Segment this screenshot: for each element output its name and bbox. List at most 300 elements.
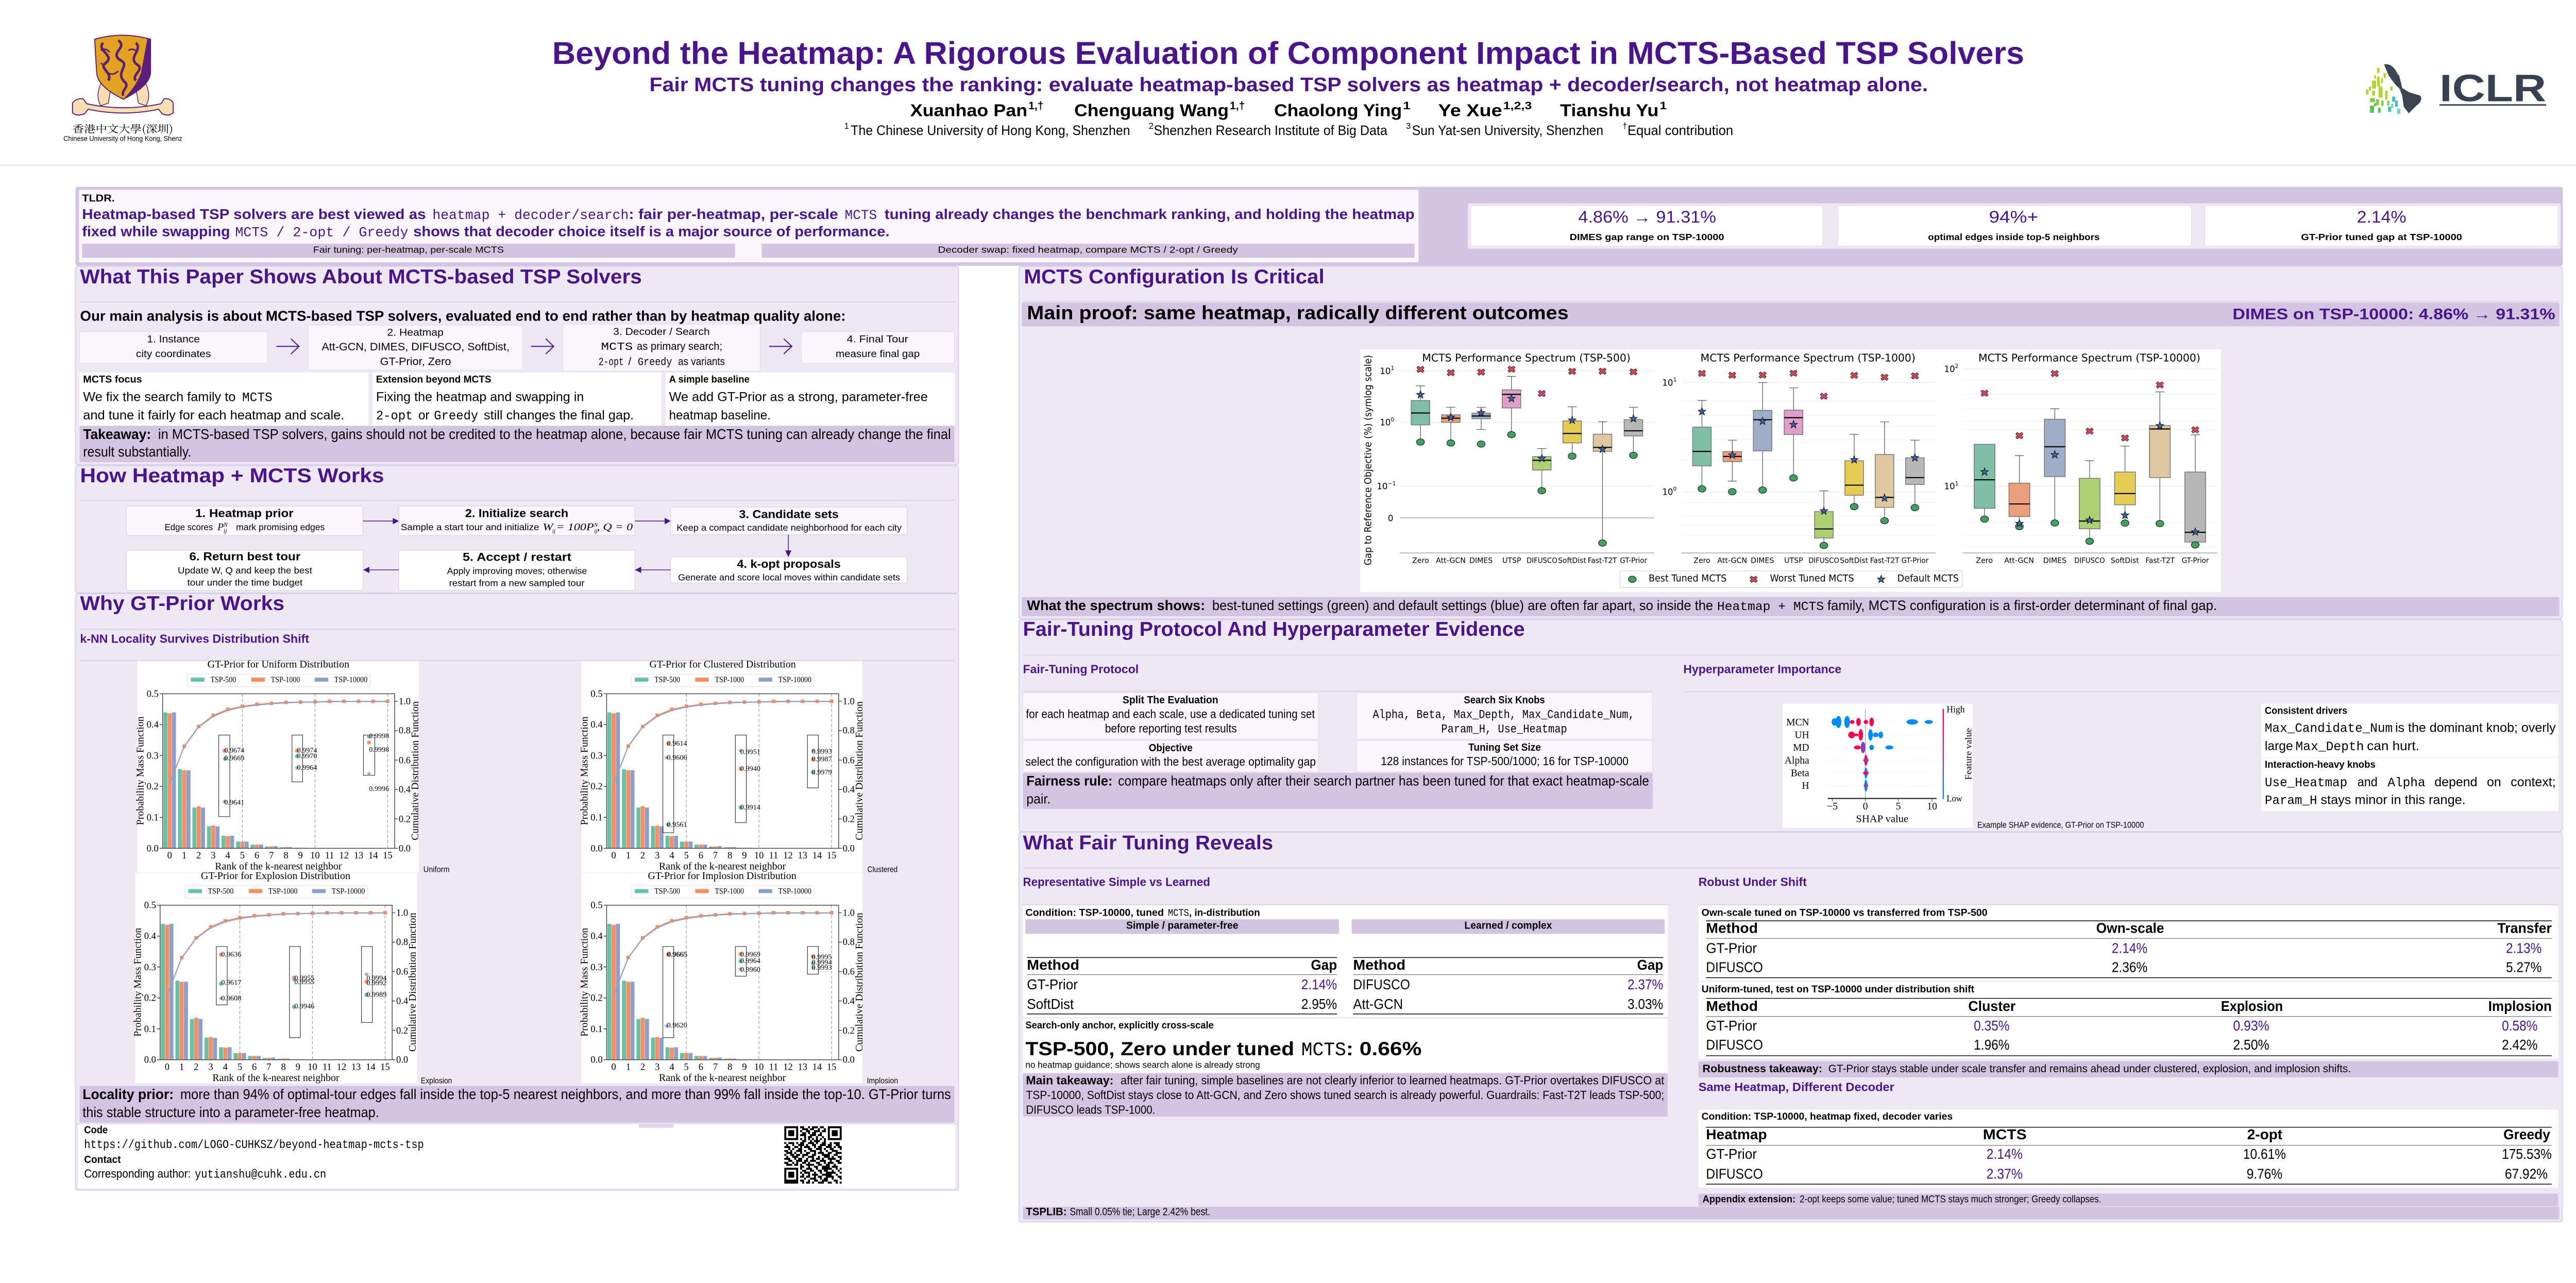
QR code — [784, 1127, 842, 1183]
category labels: DIFUSCO — [1808, 556, 1839, 565]
legend — [1620, 571, 1962, 587]
main proof banner: DIMES on TSP-10000: 4.86% → 91.31% — [2232, 306, 2555, 323]
authors: Chaolong Ying — [1274, 102, 1402, 121]
box: Decoder / Search: / — [628, 355, 631, 367]
chart: Implosion: 9 — [742, 1061, 747, 1072]
card: distribution shift table: 1.96% — [1974, 1037, 2010, 1053]
chart: Implosion: TSP-1000 — [715, 887, 744, 896]
chart: Clustered: Clustered — [868, 865, 897, 874]
chart: Clustered: 0.9951 — [740, 748, 760, 756]
chart: SHAP summary: Beta — [1791, 768, 1809, 779]
sub-heading: Hyperparameter Importance: Hyperparameter Importance — [1683, 662, 1841, 676]
box: Instance: city coordinates — [136, 348, 211, 360]
chart: Explosion: 0.3 — [144, 962, 156, 973]
strip labels: Simple / parameter-free — [1126, 920, 1239, 932]
callout: robustness takeaway: Robustness takeaway: — [1703, 1062, 1822, 1075]
chart: Implosion: 6 — [699, 1061, 703, 1072]
callout: appendix extension: Appendix extension: — [1703, 1193, 1795, 1205]
affiliations — [844, 121, 1733, 138]
callout: what the spectrum shows — [1022, 597, 2560, 616]
chart: Explosion: 0.2 — [396, 1025, 408, 1036]
chart: Explosion: Cumulative Distribution Function — [408, 913, 418, 1052]
contact: yutianshu@cuhk.edu.cn — [195, 1168, 326, 1181]
chart: Uniform: Probability Mass Function — [135, 716, 146, 825]
box: GT-Prior — [1624, 369, 1642, 459]
chart: Implosion: 10 — [754, 1061, 764, 1072]
chart: Uniform: 0.9669 — [224, 754, 244, 762]
card: Extension beyond MCTS: still changes the final gap. — [484, 408, 634, 423]
card: own-scale vs transfer table: Transfer — [2497, 920, 2552, 936]
header — [0, 35, 2576, 166]
chart: Implosion: 0.9993 — [812, 964, 832, 972]
chart: Uniform: Cumulative Distribution Function — [410, 701, 421, 840]
chart: Implosion: 0.6 — [843, 967, 855, 977]
card: distribution shift table: DIFUSCO — [1706, 1037, 1763, 1053]
chart: Uniform: 0.0 — [147, 843, 159, 854]
card: decoder table: GT-Prior — [1706, 1146, 1757, 1162]
card: Consistent drivers: large — [2265, 739, 2293, 753]
card: Tuning Set Size — [1357, 740, 1653, 772]
subplot: TSP-1000 — [1681, 370, 1936, 553]
callout: appendix extension: 2-opt keeps some value; tuned MCTS stays much stronger; Greedy collapses. — [1800, 1193, 2101, 1205]
panel: What This Paper Shows — [76, 266, 958, 465]
authors: Ye Xue — [1438, 102, 1502, 121]
contact: Contact — [84, 1154, 121, 1166]
chart: Explosion: GT-Prior for Explosion Distribution — [201, 870, 350, 882]
arrow — [636, 567, 671, 572]
box: DIMES — [2044, 370, 2065, 526]
category labels: Att-GCN — [1436, 556, 1466, 565]
chart: Uniform: 14 — [368, 850, 378, 861]
tick labels: 10 — [1380, 418, 1391, 428]
card: search-only anchor: MCTS — [1301, 1040, 1346, 1061]
card: Objective: Objective — [1149, 742, 1193, 754]
box: GT-Prior — [2185, 427, 2206, 548]
subplot titles: MCTS Performance Spectrum (TSP-10000) — [1978, 352, 2200, 364]
TLDR summary card: TLDR. — [82, 193, 115, 204]
callout: main takeaway — [1023, 1073, 1668, 1117]
chart: SHAP summary: MCN — [1786, 717, 1809, 728]
chart: Explosion: 5 — [238, 1061, 242, 1072]
chart: Clustered: 0.9614 — [667, 739, 687, 748]
table: learned: Att-GCN — [1353, 996, 1403, 1012]
callout: robustness takeaway — [1699, 1061, 2558, 1077]
tick labels: 1 — [1673, 377, 1676, 383]
chart: Clustered: 0.2 — [843, 814, 855, 825]
TLDR summary card: tuning already changes the benchmark ranking, and holding the heatmap — [885, 206, 1415, 222]
chart: Implosion: 0.9994 — [812, 958, 832, 967]
chart: Clustered: 0.9606 — [667, 753, 687, 762]
chart: Implosion: 5 — [684, 1061, 689, 1072]
chart: Explosion: 2 — [194, 1061, 198, 1072]
chart: Explosion: 0 — [165, 1061, 170, 1072]
authors: 1,2,3 — [1503, 99, 1532, 112]
panel: MCTS Configuration Is Critical — [1019, 266, 2562, 619]
chart: Uniform: 0.2 — [399, 814, 411, 825]
chart: Explosion: 0.4 — [396, 995, 408, 1006]
flow step 6 — [126, 550, 363, 590]
callout: robustness takeaway: GT-Prior stays stable under scale transfer and remains ahead under clustered, explosion, and implosion shifts. — [1828, 1062, 2351, 1075]
category labels: Zero — [1693, 556, 1710, 565]
chart: Clustered: 5 — [684, 850, 689, 861]
card: Extension beyond MCTS: Greedy — [434, 409, 478, 424]
sub-heading: Same Heatmap, Different Decoder: Same Heatmap, Different Decoder — [1699, 1080, 1894, 1093]
arrow — [769, 339, 792, 354]
card: decoder table: 67.92% — [2505, 1166, 2548, 1181]
chart: Explosion: 3 — [208, 1061, 213, 1072]
chart: Clustered: 1.0 — [843, 696, 855, 707]
chart: Uniform: TSP-10000 — [334, 676, 367, 684]
card: Interaction-heavy knobs: Param_H — [2265, 793, 2317, 808]
card: distribution shift table: 0.35% — [1974, 1018, 2010, 1034]
table: simple: 2.95% — [1301, 996, 1337, 1012]
logo: ICLR — [2366, 64, 2546, 114]
chart: Explosion: Rank of the k-nearest neighbor — [212, 1073, 340, 1084]
category labels: Att-GCN — [1717, 556, 1747, 565]
card: Consistent drivers — [2261, 704, 2558, 757]
flow step 5 — [399, 550, 635, 590]
flow step 5: restart from a new sampled tour — [449, 578, 585, 588]
arrow — [363, 518, 398, 524]
chart: Implosion: 0.9665 — [667, 950, 687, 958]
category labels: GT-Prior — [2182, 556, 2209, 565]
metric: top-5 neighbors: optimal edges inside top-5 neighbors — [1928, 232, 2100, 242]
category labels: SoftDist — [2111, 556, 2139, 565]
authors — [910, 99, 1667, 121]
card: A simple baseline: We add GT-Prior as a strong, parameter-free — [669, 390, 928, 404]
chart: Implosion: 0.4 — [590, 931, 603, 941]
TLDR summary card: Decoder swap: fixed heatmap, compare MCTS / 2-opt / Greedy — [938, 244, 1238, 255]
chart: Clustered: 4 — [669, 850, 674, 861]
chart: Explosion: 15 — [380, 1061, 390, 1072]
metric: top-5 neighbors — [1838, 206, 2191, 246]
card: own-scale vs transfer table: 2.36% — [2112, 959, 2147, 975]
card: distribution shift table: GT-Prior — [1706, 1018, 1757, 1034]
chart: Implosion: 1 — [626, 1061, 631, 1072]
chart: Clustered: 6 — [699, 850, 703, 861]
callout: takeaway: in MCTS-based TSP solvers, gains should not be credited to the heatmap alone, because fair MCTS tuning can already change the final — [158, 426, 951, 442]
chart: Implosion: 14 — [812, 1061, 822, 1072]
card: Consistent drivers: is the dominant knob; overly — [2395, 721, 2556, 735]
affiliations: 2 — [1149, 121, 1154, 131]
card: Tuning Set Size: Tuning Set Size — [1468, 741, 1541, 753]
chart: Uniform: 0.9964 — [297, 764, 317, 772]
table: simple: Method — [1027, 957, 1079, 973]
chart: Explosion: 0.9989 — [366, 991, 386, 999]
card: MCTS focus: MCTS — [242, 391, 273, 406]
chart: Clustered: 1 — [626, 850, 631, 861]
card: decoder table: Greedy — [2503, 1126, 2551, 1142]
affiliations: 1 — [844, 121, 849, 131]
chart: Clustered: 0.9993 — [812, 748, 832, 756]
chart: Clustered: 0 — [611, 850, 616, 861]
authors: Chenguang Wang — [1074, 102, 1229, 121]
affiliations: 3 — [1406, 121, 1411, 131]
card: own-scale vs transfer table — [1699, 905, 2558, 981]
sub-heading: Robust Under Shift: Robust Under Shift — [1699, 875, 1807, 889]
legend: Worst Tuned MCTS — [1770, 573, 1854, 584]
chart: SHAP summary: SHAP value — [1856, 814, 1908, 825]
box: GT-Prior — [1906, 373, 1924, 511]
callout: fairness rule — [1023, 773, 1653, 809]
chart: Uniform: Uniform — [423, 865, 450, 874]
chart: Implosion: 2 — [640, 1061, 645, 1072]
category labels: Att-GCN — [2004, 556, 2034, 565]
chart: Uniform: GT-Prior for Uniform Distribution — [208, 659, 349, 670]
flow step 2: W = 100P , Q = 0 — [543, 522, 633, 533]
chart: Implosion: 0.8 — [843, 937, 855, 948]
chart: Explosion: 6 — [252, 1061, 257, 1072]
chart: Implosion: 0.0 — [590, 1055, 603, 1066]
card: Search Six Knobs: Search Six Knobs — [1464, 694, 1545, 706]
card: distribution shift table: 0.93% — [2233, 1018, 2269, 1034]
box: Decoder / Search: 2-opt — [599, 356, 624, 368]
box: Final Tour — [802, 332, 955, 363]
chart: Uniform: Rank of the k-nearest neighbor — [215, 861, 342, 872]
card: Objective — [1023, 740, 1318, 772]
card: search-only anchor: : 0.66% — [1346, 1038, 1421, 1059]
chart: Implosion: Rank of the k-nearest neighbor — [659, 1073, 786, 1084]
chart: Uniform: 0.9674 — [224, 747, 244, 755]
card: MCTS focus: and tune it fairly for each heatmap and scale. — [83, 408, 344, 423]
chart: Implosion: 0.9964 — [740, 957, 760, 965]
subplot titles — [1422, 352, 2200, 364]
chart: Uniform: 0.6 — [399, 755, 411, 766]
callout: fairness rule: Fairness rule: — [1026, 773, 1112, 788]
card: decoder table: MCTS — [1983, 1126, 2027, 1142]
metric: GT-Prior gap: 2.14% — [2357, 208, 2406, 226]
flow step 2 — [399, 506, 635, 536]
card: decoder table: Heatmap — [1706, 1126, 1767, 1142]
chart: SHAP summary: 0 — [1863, 801, 1868, 812]
chart: Explosion: 0.9955 — [294, 978, 314, 986]
subplot: TSP-10000 — [1962, 369, 2217, 553]
chart: Explosion: 0.0 — [144, 1055, 156, 1066]
chart: Clustered: 14 — [812, 850, 822, 861]
affiliations: Sun Yat-sen University, Shenzhen — [1412, 123, 1603, 138]
chart: Uniform: 7 — [269, 850, 274, 861]
card: Interaction-heavy knobs: depend on context; — [2434, 775, 2556, 789]
chart: Uniform: 0.1 — [147, 813, 159, 823]
flow step 1: Edge scores — [165, 522, 213, 532]
card: Search Six Knobs: Alpha, Beta, Max_Depth, Max_Candidate_Num, — [1373, 708, 1635, 722]
chart: Uniform: TSP-1000 — [271, 676, 300, 684]
category labels: SoftDist — [1558, 556, 1586, 565]
arrow — [364, 567, 399, 572]
affiliations: † — [1622, 121, 1627, 131]
chart: SHAP summary: MD — [1793, 742, 1809, 753]
card: Interaction-heavy knobs: and — [2358, 775, 2378, 789]
chart: Implosion: 0.0 — [843, 1055, 855, 1066]
card: Split The Evaluation: Split The Evaluation — [1123, 694, 1218, 706]
card: distribution shift table — [1699, 982, 2558, 1059]
chart: SHAP summary — [1783, 704, 1973, 828]
chart: Explosion: Probability Mass Function — [133, 928, 144, 1037]
box: Decoder / Search: 3. Decoder / Search — [613, 326, 710, 337]
tick labels: 10 — [1944, 482, 1955, 492]
category labels: Fast-T2T — [1870, 556, 1900, 565]
chart: Uniform: 0.4 — [399, 784, 411, 795]
box: UTSP — [1784, 370, 1803, 481]
chart: Explosion: 0.9608 — [221, 994, 241, 1002]
chart: Implosion: Probability Mass Function — [579, 928, 590, 1037]
chart: Implosion: 4 — [669, 1061, 674, 1072]
contact: Corresponding author: — [84, 1167, 191, 1180]
chart: Implosion — [579, 870, 898, 1086]
tick labels: 10 — [1662, 487, 1673, 497]
chart: Uniform: 0.2 — [147, 781, 159, 792]
title: Beyond the Heatmap: A Rigorous Evaluation of Component Impact in MCTS-Based TSP Solvers — [552, 36, 2024, 71]
card: Consistent drivers: Max_Depth — [2296, 739, 2364, 754]
TLDR summary card: shows that decoder choice itself is a major source of performance. — [413, 223, 890, 239]
chart: Implosion: 0.1 — [590, 1024, 603, 1035]
logo: CUHK Shenzhen — [63, 35, 182, 143]
callout: main takeaway: after fair tuning, simple baselines are not clearly inferior to learned heatmaps. GT-Prior overtakes DIFUSCO at — [1121, 1074, 1665, 1087]
box: Heatmap: 2. Heatmap — [387, 327, 444, 339]
flow step 2: ij — [594, 528, 597, 534]
callout: what the spectrum shows: Heatmap + MCTS — [1717, 600, 1824, 614]
metric: top-5 neighbors: 94%+ — [1989, 208, 2038, 226]
flow step 6: tour under the time budget — [188, 577, 302, 587]
card: decoder table: 2.37% — [1987, 1166, 2023, 1181]
legend: Default MCTS — [1897, 573, 1959, 584]
card: search-only anchor: no heatmap guidance; shows search alone is already strong — [1025, 1059, 1260, 1070]
chart: Implosion: 11 — [769, 1061, 778, 1072]
panel: How Heatmap + MCTS Works — [76, 465, 958, 593]
chart: Implosion: 0.9969 — [740, 950, 760, 958]
chart: Clustered: 0.3 — [590, 750, 603, 761]
chart: Clustered: 0.6 — [843, 755, 855, 766]
chart: Clustered: Rank of the k-nearest neighbor — [659, 861, 786, 872]
authors: Xuanhao Pan — [910, 102, 1027, 121]
strip labels — [1025, 919, 1665, 934]
flow step 2: 2. Initialize search — [465, 507, 568, 519]
chart: Explosion: 0.5 — [144, 900, 156, 911]
arrow — [635, 518, 670, 524]
card: own-scale vs transfer table: DIFUSCO — [1706, 959, 1763, 975]
category labels: DIMES — [1469, 556, 1493, 565]
card: condition and gap tables — [1023, 905, 1668, 1017]
TLDR summary card: : fair per-heatmap, per-scale — [629, 206, 838, 222]
flow step 1: ij — [224, 528, 227, 534]
chart: Explosion: TSP-500 — [208, 887, 234, 896]
box: Att-GCN — [2009, 432, 2030, 530]
y axis label: Gap to Reference Objective (%) (symlog scale) — [1363, 355, 1374, 565]
flow step 1: mark promising edges — [236, 522, 325, 532]
card: Consistent drivers: can hurt. — [2367, 739, 2419, 753]
chart: Uniform: 0.9974 — [297, 747, 317, 755]
box: DIFUSCO — [2079, 428, 2100, 545]
category labels — [1412, 556, 2209, 565]
table: learned: 3.03% — [1628, 996, 1663, 1012]
chart: Explosion: 9 — [296, 1061, 300, 1072]
TLDR band — [76, 187, 2563, 266]
card: own-scale vs transfer table: Own-scale tuned on TSP-10000 vs transferred from TSP-500 — [1702, 907, 1988, 918]
chart: SHAP summary: 5 — [1896, 801, 1901, 812]
chart: Clustered: 0.9979 — [812, 768, 832, 776]
heading: MCTS Configuration Is Critical — [1024, 266, 1325, 288]
chart: Clustered: 12 — [783, 850, 793, 861]
tick labels — [1377, 363, 1959, 523]
chart: Explosion: 1.0 — [396, 907, 408, 918]
category labels: UTSP — [1784, 556, 1803, 565]
chart: Implosion: Implosion — [867, 1077, 898, 1086]
card: MCTS focus: MCTS focus — [83, 374, 142, 385]
affiliations: Shenzhen Research Institute of Big Data — [1154, 123, 1387, 138]
category labels: Zero — [1412, 556, 1429, 565]
card: A simple baseline — [666, 373, 955, 426]
table: learned: 2.37% — [1628, 976, 1663, 992]
panel: What Fair Tuning Reveals — [1019, 832, 2562, 1222]
card: Search Six Knobs — [1357, 693, 1653, 739]
chart: Uniform: 6 — [255, 850, 259, 861]
box: Final Tour: measure final gap — [836, 348, 920, 360]
card: MCTS focus — [79, 373, 368, 426]
chart: Uniform: 0.9998 — [369, 732, 389, 740]
heading: What Fair Tuning Reveals — [1023, 832, 1273, 854]
chart: Implosion: 0.9620 — [667, 1021, 687, 1029]
tick labels: 1 — [1391, 365, 1394, 372]
chart: Explosion: 8 — [281, 1061, 286, 1072]
chart: Uniform: 11 — [325, 850, 334, 861]
box: SoftDist — [1845, 372, 1863, 510]
authors: 1,† — [1028, 99, 1044, 112]
pipeline — [79, 324, 955, 371]
caption: SHAP evidence: Example SHAP evidence, GT-Prior on TSP-10000 — [1977, 820, 2144, 830]
chart: Uniform: 4 — [226, 850, 230, 861]
callout: TSPLIB: Small 0.05% tie; Large 2.42% best. — [1070, 1206, 1210, 1218]
card: Interaction-heavy knobs: Alpha — [2387, 775, 2426, 790]
chart: Explosion: 0.9994 — [366, 974, 386, 982]
callout: locality prior: Locality prior: — [82, 1086, 174, 1102]
chart: Explosion: 0.9946 — [294, 1002, 314, 1010]
box: Zero — [1411, 366, 1430, 445]
TLDR summary card: heatmap + decoder/search — [432, 208, 629, 223]
callout: what the spectrum shows: best-tuned settings (green) and default settings (blue) are often far apart, so inside the — [1212, 598, 1713, 613]
main proof banner — [1022, 301, 2560, 326]
chart: Clustered: 11 — [769, 850, 778, 861]
table: learned: Method — [1353, 957, 1405, 973]
chart: Explosion: 0.9955 — [294, 974, 314, 982]
card: own-scale vs transfer table: 2.14% — [2112, 940, 2147, 956]
chart: Uniform: 0.5 — [147, 688, 159, 699]
chart: Implosion: 1.0 — [843, 907, 855, 918]
card: own-scale vs transfer table: Method — [1706, 920, 1758, 936]
chart: Uniform: 10 — [310, 850, 320, 861]
chart: Explosion: 0.9617 — [221, 978, 241, 987]
chart: Explosion: 0.9636 — [221, 950, 241, 958]
card: Search Six Knobs: Param_H, Use_Heatmap — [1441, 723, 1567, 737]
logo: CUHK Shenzhen: 香港中文大學(深圳) — [73, 121, 173, 136]
card: own-scale vs transfer table: GT-Prior — [1706, 940, 1757, 956]
box: Att-GCN — [1442, 369, 1460, 446]
condition text — [1025, 907, 1260, 919]
chart: Uniform: 15 — [383, 850, 393, 861]
card: distribution shift table: Explosion — [2221, 998, 2283, 1014]
chart: Uniform: 0.9996 — [369, 785, 389, 793]
card: Extension beyond MCTS: or — [418, 408, 430, 423]
chart: Implosion: 0.9960 — [740, 966, 760, 974]
chart: Implosion: 0.9665 — [667, 950, 687, 958]
chart: SHAP summary: UH — [1794, 730, 1809, 740]
authors: 1 — [1659, 99, 1667, 112]
chart: Implosion: 12 — [783, 1061, 793, 1072]
metric: GT-Prior gap — [2205, 206, 2558, 246]
card: distribution shift table: Implosion — [2488, 998, 2552, 1014]
TLDR summary card: MCTS — [845, 208, 877, 223]
contact — [84, 1154, 326, 1181]
chart: Explosion: 13 — [351, 1061, 361, 1072]
